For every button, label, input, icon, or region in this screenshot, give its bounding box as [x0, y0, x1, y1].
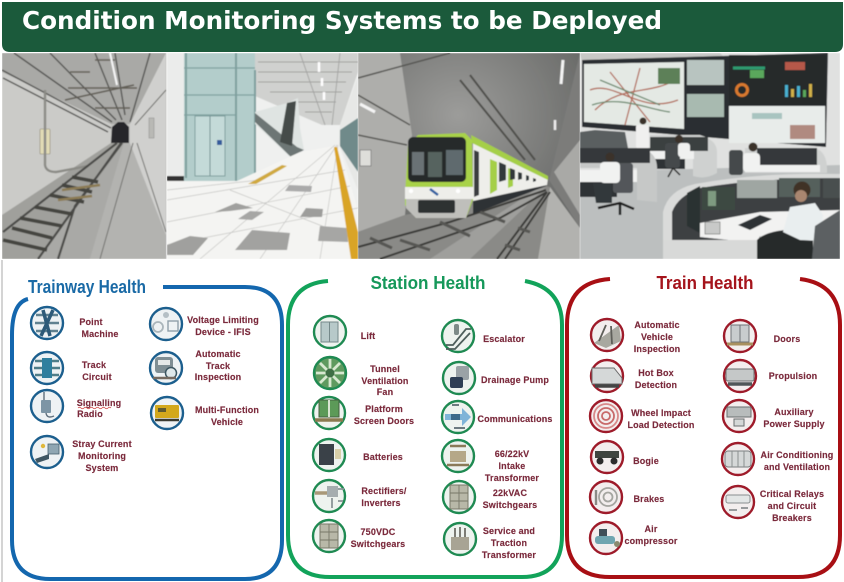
item: air compressor: compressor: [624, 536, 678, 546]
item: signalling radio: [31, 390, 121, 422]
item: air compressor: [590, 522, 678, 554]
item: brakes: [590, 481, 664, 513]
item: automatic track inspection: Automatic: [195, 349, 241, 359]
panel: trainway health: [12, 277, 282, 579]
item: stray current monitoring system: Stray Current: [72, 439, 132, 449]
item: 66/22kV intake transformer: Intake: [499, 461, 525, 471]
item: critical relays and circuit breakers: [722, 486, 824, 523]
item: hot box detection: Detection: [635, 380, 677, 390]
image: operation control centre: [580, 53, 840, 259]
item: point machine: Machine: [81, 329, 119, 339]
item: air conditioning and ventilation: Air Conditioning: [761, 450, 833, 460]
item: tunnel ventilation fan: Tunnel: [370, 364, 400, 374]
title banner: Condition Monitoring Systems to be Deployed: [22, 6, 662, 35]
item: rectifiers and inverters: Rectifiers/: [361, 486, 407, 496]
item: brakes: Brakes: [634, 494, 664, 504]
item: hot box detection: Hot Box: [638, 368, 674, 378]
item: communications: Communications: [477, 414, 553, 424]
item: propulsion: Propulsion: [769, 371, 817, 381]
item: air conditioning and ventilation: [722, 443, 833, 475]
heading: train health: Train Health: [656, 273, 754, 293]
item: stray current monitoring system: System: [86, 463, 118, 473]
item: critical relays and circuit breakers: Critical Relays: [760, 489, 824, 499]
item: voltage limiting device: [150, 308, 259, 340]
item: platform screen doors: Platform: [365, 404, 403, 414]
item: 66/22kV intake transformer: 66/22kV: [495, 449, 529, 459]
item: service and traction transformer: Service and: [483, 526, 535, 536]
item: multi-function vehicle: Vehicle: [211, 417, 243, 427]
item: bogie: Bogie: [633, 456, 659, 466]
item: propulsion: [724, 360, 817, 392]
item: auxiliary power supply: Auxiliary: [774, 407, 814, 417]
item: automatic track inspection: [150, 349, 241, 384]
item: 66/22kV intake transformer: Transformer: [485, 473, 539, 483]
item: doors: [724, 320, 800, 352]
item: bogie: [591, 441, 659, 473]
item: signalling radio: Signalling: [77, 398, 121, 408]
item: service and traction transformer: Transformer: [482, 550, 536, 560]
panel: train health: [567, 273, 840, 577]
item: automatic vehicle inspection: Vehicle: [641, 332, 673, 342]
item: automatic vehicle inspection: Automatic: [634, 320, 680, 330]
item: point machine: [31, 307, 119, 339]
image: green metro train in tunnel: [358, 53, 580, 259]
item: platform screen doors: [313, 397, 414, 429]
item: voltage limiting device: Device - IFIS: [195, 327, 251, 337]
item: wheel impact load detection: Load Detection: [627, 420, 695, 430]
item: tunnel ventilation fan: [314, 357, 409, 397]
item: point machine: Point: [79, 317, 103, 327]
item: lift: Lift: [361, 331, 375, 341]
item: doors: Doors: [774, 334, 800, 344]
item: track circuit: Circuit: [82, 372, 112, 382]
item: wheel impact load detection: [590, 400, 695, 432]
item: service and traction transformer: [444, 523, 536, 560]
item: drainage pump: Drainage Pump: [481, 375, 549, 385]
panel: station health: [288, 273, 562, 577]
item: 750VDC switchgears: [313, 520, 405, 552]
item: escalator: [442, 320, 525, 352]
item: 750VDC switchgears: Switchgears: [351, 539, 405, 549]
item: rectifiers and inverters: [313, 480, 407, 512]
item: platform screen doors: Screen Doors: [354, 416, 414, 426]
item: air compressor: Air: [645, 524, 658, 534]
item: 22kVAC switchgears: 22kVAC: [493, 488, 527, 498]
item: automatic vehicle inspection: Inspection: [634, 344, 680, 354]
item: signalling radio: Radio: [77, 409, 103, 419]
item: voltage limiting device: Voltage Limiting: [187, 315, 259, 325]
item: communications: [442, 401, 553, 433]
item: 22kVAC switchgears: [443, 481, 537, 513]
item: multi-function vehicle: [151, 397, 259, 429]
item: hot box detection: [591, 360, 677, 392]
item: auxiliary power supply: [723, 400, 825, 432]
item: automatic vehicle inspection: [591, 319, 680, 354]
item: stray current monitoring system: Monitoring: [78, 451, 126, 461]
heading: station health: Station Health: [370, 273, 486, 293]
item: 66/22kV intake transformer: [442, 440, 539, 483]
item: batteries: Batteries: [363, 452, 403, 462]
item: track circuit: [31, 352, 112, 384]
item: tunnel ventilation fan: Ventilation: [361, 376, 409, 386]
item: rectifiers and inverters: Inverters: [361, 498, 401, 508]
item: batteries: [313, 439, 403, 471]
item: track circuit: Track: [82, 360, 107, 370]
item: 22kVAC switchgears: Switchgears: [483, 500, 537, 510]
image: station platform with lift and escalator: [167, 53, 358, 259]
item: 750VDC switchgears: 750VDC: [361, 527, 396, 537]
heading: trainway health: Trainway Health: [28, 277, 146, 297]
item: lift: [314, 316, 375, 348]
item: critical relays and circuit breakers: and Circuit: [768, 501, 816, 511]
item: tunnel ventilation fan: Fan: [377, 387, 393, 397]
item: service and traction transformer: Traction: [491, 538, 527, 548]
item: automatic track inspection: Track: [206, 361, 231, 371]
item: auxiliary power supply: Power Supply: [763, 419, 825, 429]
item: multi-function vehicle: Multi-Function: [195, 405, 259, 415]
item: escalator: Escalator: [483, 334, 525, 344]
item: automatic track inspection: Inspection: [195, 372, 241, 382]
item: wheel impact load detection: Wheel Impact: [631, 408, 691, 418]
item: critical relays and circuit breakers: Breakers: [772, 513, 812, 523]
item: drainage pump: [443, 362, 549, 394]
item: stray current monitoring system: [31, 436, 132, 473]
item: air conditioning and ventilation: and Ventilation: [764, 462, 830, 472]
title banner: [2, 2, 843, 52]
image: trainway tunnel: [2, 53, 167, 259]
